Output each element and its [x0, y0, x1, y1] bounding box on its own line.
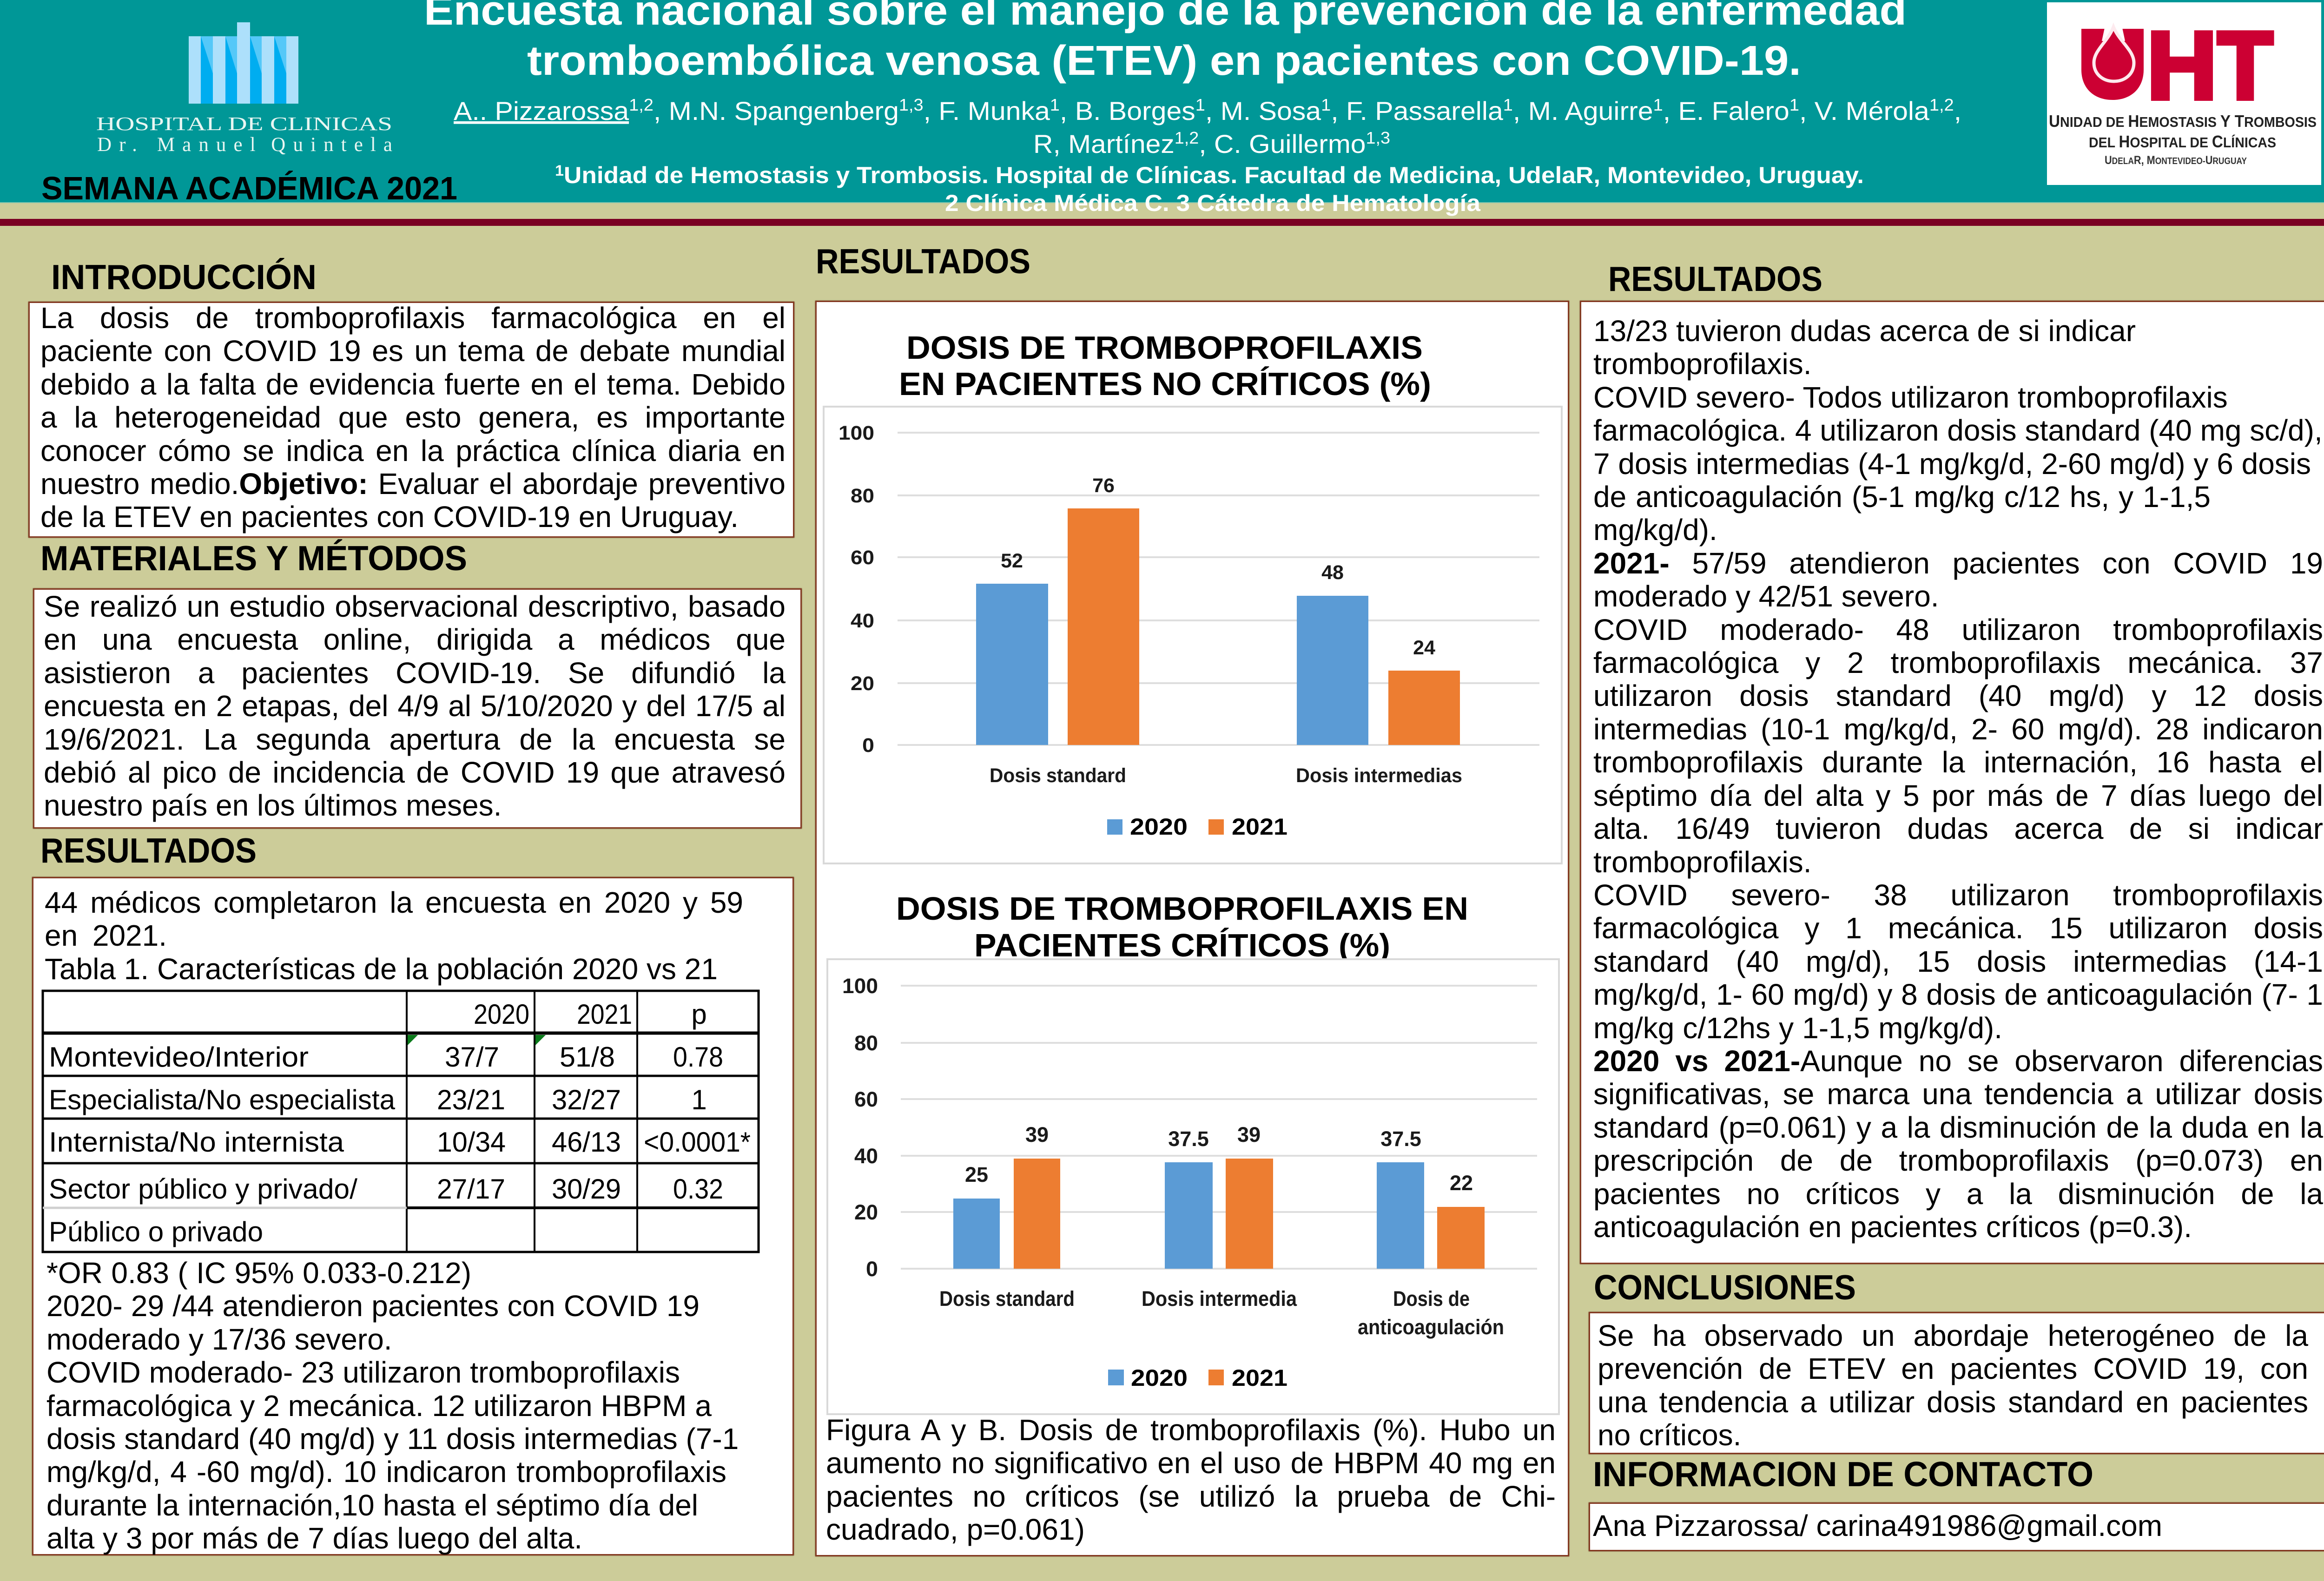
text: results intro: en 2021.: [45, 919, 167, 952]
table 1: population characteristics: 27/17: [437, 1173, 505, 1205]
header band: [0, 0, 2324, 203]
text: results right: utilizaron dosis standard (40 mg/d) y 12 dosis: [1593, 679, 2323, 712]
authors: , M. Aguirre: [1513, 96, 1653, 125]
chart title: critical patients: PACIENTES CRÍTICOS (%): [974, 927, 1390, 963]
table 1: population characteristics: 51/8: [560, 1041, 615, 1073]
text: materials and methods: nuestro país en los últimos meses.: [44, 789, 502, 822]
table 1: population characteristics: 32/27: [552, 1084, 621, 1115]
text: materials and methods: 19/6/2021. La segunda apertura de la encuesta se: [44, 723, 786, 756]
bar chart: non-critical patients: 80: [851, 485, 874, 507]
table 1: population characteristics: p: [691, 999, 707, 1030]
text: results after table: farmacológica y 2 mecánica. 12 utilizaron HBPM a: [46, 1389, 712, 1423]
table 1: population characteristics: <0.0001*: [644, 1126, 751, 1158]
bar chart: non-critical patients: 0: [862, 734, 874, 757]
bar chart: non-critical patients: 76: [1092, 474, 1115, 497]
text: materials and methods: Se realizó un estudio observacional descriptivo, basado: [44, 590, 786, 623]
table 1: population characteristics: 2020: [474, 999, 529, 1030]
panel: introduction: [28, 302, 794, 538]
text: results right: [1593, 315, 2323, 1244]
bar chart: critical patients: 39: [1025, 1123, 1049, 1146]
text: results right: farmacológica y 1 mecánica. 15 utilizaron dosis: [1593, 911, 2323, 945]
text: materials and methods: debió al pico de incidencia de COVID 19 que atravesó: [44, 756, 786, 789]
table 1: population characteristics: 10/34: [437, 1126, 506, 1158]
bar chart: critical patients: 20: [854, 1200, 878, 1224]
bar chart: critical patients: 100: [842, 974, 878, 998]
authors: , M. Sosa: [1205, 96, 1321, 125]
text: materials and methods: asistieron a pacientes COVID-19. Se difundió la: [44, 656, 786, 690]
heading: materials and methods: MATERIALES Y MÉTODOS: [40, 539, 467, 578]
panel: materials and methods: [33, 588, 802, 829]
text: results after table: COVID moderado- 23 utilizaron tromboprofilaxis: [46, 1356, 680, 1389]
text: introduction: debido a la falta de evidencia fuerte en el tema. Debido: [40, 368, 786, 401]
text: results intro: 44 médicos completaron la encuesta en 2020 y 59: [45, 886, 743, 919]
bar chart: non-critical patients: 100: [838, 422, 874, 444]
text: results intro: Tabla 1. Características de la población 2020 vs 21: [45, 952, 718, 986]
text: contact: Ana Pizzarossa/ carina491986@gmail.com: [1593, 1509, 2162, 1542]
table 1: population characteristics: 30/29: [552, 1173, 621, 1205]
text: results right: COVID severo- 38 utilizaron tromboprofilaxis: [1593, 878, 2323, 912]
table 1: population characteristics: 37/7: [445, 1041, 499, 1073]
table 1: population characteristics: Internista/No internista: [49, 1126, 344, 1158]
text: results right: de anticoagulación (5-1 mg/kg c/12 hs, y 1-1,5: [1593, 480, 2211, 514]
text: results after table: *OR 0.83 ( IC 95% 0.033-0.212): [46, 1256, 471, 1290]
dark red divider bar: [0, 219, 2324, 226]
authors: , V. Mérola: [1799, 96, 1930, 125]
text: results right: 13/23 tuvieron dudas acerca de si indicar: [1593, 314, 2136, 348]
text: results right: 7 dosis intermedias (4-1 mg/kg/d, 2-60 mg/d) y 6 dosis: [1593, 447, 2311, 481]
bar chart: critical patients: 60: [854, 1087, 878, 1111]
text: results right: tromboprofilaxis.: [1593, 845, 1812, 878]
authors: 1: [1653, 95, 1663, 114]
authors: , B. Borges: [1060, 96, 1195, 125]
authors: , F. Munka: [924, 96, 1050, 125]
authors: 1: [1050, 95, 1060, 114]
text: materials and methods: [44, 590, 786, 823]
text: figure caption: pacientes no críticos (se utilizó la prueba de Chi-: [826, 1480, 1556, 1513]
table 1: population characteristics: Público o privado: [49, 1216, 263, 1247]
text: conclusions: [1598, 1319, 2308, 1452]
heading: results center: RESULTADOS: [816, 242, 1030, 281]
affiliations: [555, 162, 1864, 216]
text: results right: séptimo día del alta y 5 por más de 7 días luego del: [1593, 779, 2323, 812]
bar chart: critical patients: 39: [1237, 1123, 1261, 1146]
text: results right: farmacológica. 4 utilizaron dosis standard (40 mg sc/d),: [1593, 414, 2323, 447]
icon: UHT logo: DEL HOSPITAL DE CLÍNICAS: [2089, 132, 2276, 151]
table 1: population characteristics: Especialista/No especialista: [49, 1084, 396, 1115]
icon: UHT logo: [2047, 2, 2321, 185]
bar chart: critical patients: 2020: [1131, 1365, 1188, 1391]
bar chart: non-critical patients: 48: [1321, 561, 1344, 584]
table 1: population characteristics: Sector público y privado/: [49, 1173, 357, 1205]
text: conclusions: una tendencia a utilizar dosis standard en pacientes: [1598, 1385, 2308, 1419]
bar chart: non-critical patients: 40: [851, 610, 874, 632]
chart title: critical patients: [896, 890, 1468, 963]
table 1: population characteristics: 2021: [577, 999, 632, 1030]
table 1: population characteristics: 46/13: [552, 1126, 621, 1158]
authors: R, Martínez: [1033, 129, 1168, 158]
authors: 1,2: [1929, 95, 1954, 114]
text: materials and methods: en una encuesta online, dirigida a médicos que: [44, 623, 786, 656]
table 1: population characteristics: [43, 991, 759, 1252]
bar chart: critical patients: 80: [854, 1031, 878, 1055]
bar chart: critical patients: Dosis de: [1393, 1287, 1470, 1311]
event label: SEMANA ACADÉMICA 2021: [41, 170, 457, 206]
text: results right: anticoagulación en pacientes críticos (p=0.3).: [1593, 1210, 2192, 1244]
bar chart: non-critical patients: 52: [1001, 550, 1023, 572]
authors: 1: [1195, 95, 1205, 114]
bar chart: critical patients: 40: [854, 1144, 878, 1168]
bar chart: critical patients: [827, 959, 1559, 1414]
icon: UHT logo: H: [2147, 12, 2217, 119]
authors: 1: [1321, 95, 1331, 114]
text: introduction: [40, 302, 786, 534]
text: introduction: a la heterogeneidad que esto genera, es importante: [40, 401, 786, 434]
text: results right: significativas, se marca una tendencia a utilizar dosis: [1593, 1077, 2323, 1111]
table 1: population characteristics: 23/21: [437, 1084, 505, 1115]
text: results after table: mg/kg/d, 4 -60 mg/d). 10 indicaron tromboprofilaxis: [46, 1455, 726, 1489]
text: conclusions: Se ha observado un abordaje heterogéneo de la: [1598, 1319, 2308, 1352]
title: tromboembólica venosa (ETEV) en pacientes con COVID-19.: [527, 38, 1801, 84]
text: figure caption: aumento no significativo en el uso de HBPM 40 mg en: [826, 1446, 1556, 1480]
bar chart: non-critical patients: 2020: [1130, 814, 1188, 840]
text: results right: pacientes no críticos y a la disminución de la: [1593, 1177, 2323, 1211]
text: introduction: de la ETEV en pacientes con COVID-19 en Uruguay.: [40, 500, 739, 534]
panel: conclusions: [1589, 1312, 2324, 1454]
affiliations: 1: [555, 162, 564, 179]
icon: UHT logo: UDELAR, MONTEVIDEO-URUGUAY: [2105, 154, 2247, 167]
bar chart: critical patients: 22: [1450, 1171, 1473, 1195]
chart title: non-critical patients: DOSIS DE TROMBOPROFILAXIS: [906, 329, 1423, 366]
bar chart: critical patients: Dosis intermedia: [1142, 1287, 1297, 1311]
text: results after table: alta y 3 por más de 7 días luego del alta.: [46, 1522, 582, 1555]
icon: UHT logo: T: [2218, 12, 2273, 119]
bar chart: critical patients: 25: [965, 1163, 988, 1186]
authors: 1,2: [1175, 128, 1199, 147]
authors: 1: [1503, 95, 1513, 114]
authors: [454, 95, 1961, 158]
authors: 1,3: [1366, 128, 1390, 147]
chart title: non-critical patients: [899, 329, 1431, 402]
panel: results center charts: [815, 301, 1569, 1556]
authors: 1: [1789, 95, 1799, 114]
authors: ,: [1954, 96, 1961, 125]
panel: contact: [1589, 1502, 2324, 1551]
text: results right: COVID moderado- 48 utilizaron tromboprofilaxis: [1593, 613, 2323, 646]
text: results right: alta. 16/49 tuvieron dudas acerca de si indicar: [1593, 812, 2323, 845]
authors: 1,2: [629, 95, 654, 114]
authors: , C. Guillermo: [1199, 129, 1366, 158]
text: results right: prescripción de de tromboprofilaxis (p=0.073) en: [1593, 1144, 2323, 1177]
text: results right: 2021- 57/59 atendieron pacientes con COVID 19: [1593, 547, 2323, 580]
icon: UHT logo: U: [2082, 12, 2143, 119]
authors: 1,3: [899, 95, 924, 114]
heading: conclusions: CONCLUSIONES: [1594, 1268, 1856, 1307]
text: results after table: [46, 1257, 744, 1555]
text: results right: farmacológica y 2 tromboprofilaxis mecánica. 37: [1593, 646, 2323, 679]
bar chart: non-critical patients: 60: [851, 547, 874, 569]
text: results right: 2020 vs 2021-Aunque no se observaron diferencias: [1593, 1044, 2323, 1078]
text: conclusions: no críticos.: [1598, 1418, 1741, 1452]
text: results right: intermedias (10-1 mg/kg/d, 2- 60 mg/d). 28 indicaron: [1593, 712, 2323, 746]
text: figure caption: [826, 1414, 1556, 1547]
bar chart: critical patients: 2021: [1232, 1365, 1287, 1391]
text: results right: mg/kg/d).: [1593, 513, 1717, 547]
text: conclusions: prevención de ETEV en pacientes COVID 19, con: [1598, 1352, 2308, 1385]
bar chart: critical patients: Dosis standard: [939, 1287, 1075, 1311]
bar chart: critical patients: anticoagulación: [1358, 1315, 1504, 1339]
text: results right: mg/kg c/12hs y 1-1,5 mg/kg/d).: [1593, 1011, 2002, 1045]
bar chart: non-critical patients: 2021: [1232, 814, 1287, 840]
bar chart: non-critical patients: [824, 407, 1562, 863]
text: results after table: dosis standard (40 mg/d) y 11 dosis intermedias (7-1: [46, 1422, 739, 1456]
text: results right: tromboprofilaxis durante la internación, 16 hasta el: [1593, 745, 2323, 779]
text: introduction: conocer cómo se indica en la práctica clínica diaria en: [40, 434, 786, 468]
heading: contact: INFORMACION DE CONTACTO: [1593, 1455, 2093, 1494]
text: materials and methods: encuesta en 2 etapas, del 4/9 al 5/10/2020 y del 17/5 al: [44, 689, 786, 723]
bar chart: critical patients: 37.5: [1380, 1127, 1421, 1151]
text: results right: COVID severo- Todos utilizaron tromboprofilaxis: [1593, 381, 2228, 414]
icon: hospital logo: [189, 22, 298, 104]
authors: , M.N. Spangenberg: [654, 96, 899, 125]
hospital subtitle: Dr. Manuel Quintela: [97, 134, 392, 156]
text: results after table: moderado y 17/36 severo.: [46, 1323, 392, 1356]
text: results after table: durante la internación,10 hasta el séptimo día del: [46, 1489, 698, 1522]
text: results right: mg/kg/d, 1- 60 mg/d) y 8 dosis de anticoagulación (7- 1: [1593, 978, 2323, 1011]
affiliations: Unidad de Hemostasis y Trombosis. Hospital de Clínicas. Facultad de Medicina, UdelaR, Montevideo, Uruguay.: [564, 162, 1864, 188]
panel: results right: [1580, 301, 2324, 1264]
heading: introduction: INTRODUCCIÓN: [51, 257, 317, 296]
text: introduction: La dosis de tromboprofilaxis farmacológica en el: [40, 301, 786, 335]
text: figure caption: cuadrado, p=0.061): [826, 1513, 1085, 1546]
chart title: critical patients: DOSIS DE TROMBOPROFILAXIS EN: [896, 890, 1468, 927]
text: results right: tromboprofilaxis.: [1593, 347, 1812, 381]
chart title: non-critical patients: EN PACIENTES NO CRÍTICOS (%): [899, 366, 1431, 402]
table 1: population characteristics: 0.78: [673, 1041, 723, 1073]
text: introduction: nuestro medio.Objetivo: Evaluar el abordaje preventivo: [40, 467, 786, 501]
heading: results left: RESULTADOS: [40, 831, 257, 870]
text: results right: moderado y 42/51 severo.: [1593, 580, 1939, 613]
affiliations: 2 Clínica Médica C. 3 Cátedra de Hematología: [945, 190, 1481, 216]
bar chart: non-critical patients: 24: [1413, 637, 1435, 659]
text: results after table: 2020- 29 /44 atendieron pacientes con COVID 19: [46, 1289, 700, 1323]
text: figure caption: Figura A y B. Dosis de tromboprofilaxis (%). Hubo un: [826, 1413, 1556, 1447]
table 1: population characteristics: Montevideo/Interior: [49, 1041, 309, 1073]
title: [424, 0, 1907, 84]
panel: results left: [32, 877, 794, 1555]
bar chart: non-critical patients: 20: [851, 672, 874, 695]
heading: results right: RESULTADOS: [1608, 259, 1822, 298]
table 1: population characteristics: 1: [691, 1084, 707, 1115]
text: results right: standard (p=0.061) y a la disminución de la duda en la: [1593, 1111, 2323, 1144]
authors: , E. Falero: [1663, 96, 1789, 125]
hospital name: HOSPITAL DE CLINICAS: [96, 113, 392, 134]
bar chart: critical patients: 0: [866, 1257, 878, 1281]
text: results intro: [45, 886, 743, 986]
bar chart: non-critical patients: Dosis intermedias: [1296, 764, 1462, 787]
text: results right: standard (40 mg/d), 15 dosis intermedias (14-1: [1593, 945, 2323, 978]
authors: , F. Passarella: [1331, 96, 1504, 125]
authors: A.. Pizzarossa: [454, 96, 629, 125]
text: introduction: paciente con COVID 19 es un tema de debate mundial: [40, 334, 786, 368]
bar chart: critical patients: 37.5: [1168, 1127, 1209, 1151]
table 1: population characteristics: 0.32: [673, 1173, 723, 1205]
bar chart: non-critical patients: Dosis standard: [990, 764, 1126, 787]
icon: UHT logo: UNIDAD DE HEMOSTASIS Y TROMBOSIS: [2049, 112, 2317, 131]
